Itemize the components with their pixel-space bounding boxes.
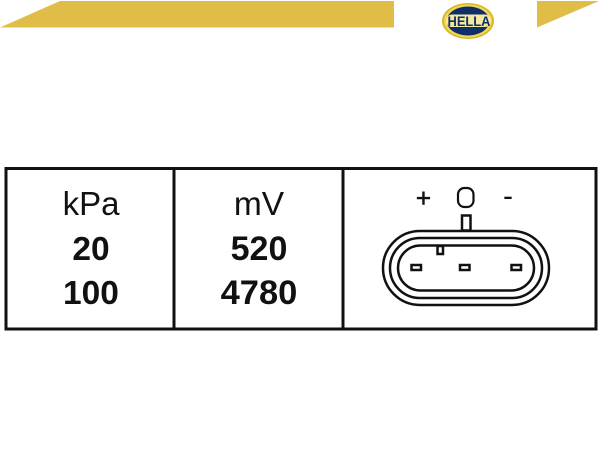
column: kPa: kPa	[63, 185, 120, 222]
table frame	[6, 168, 596, 330]
header band left	[0, 1, 394, 28]
column: mV	[221, 186, 297, 312]
column: mV: 4780	[221, 274, 297, 312]
column: mV: mV	[234, 186, 285, 223]
connector diagram	[383, 216, 549, 305]
header accent right	[537, 1, 599, 28]
icon: HELLA logo	[442, 3, 494, 39]
connector pin labels: -	[503, 180, 513, 212]
column: kPa: 100	[63, 275, 119, 312]
column: kPa	[63, 185, 120, 312]
icon: HELLA logo: HELLA	[448, 13, 490, 29]
connector pin labels: +	[416, 183, 431, 213]
column: mV: 520	[231, 230, 287, 268]
column: kPa: 20	[72, 231, 110, 268]
connector pin labels	[416, 180, 513, 213]
